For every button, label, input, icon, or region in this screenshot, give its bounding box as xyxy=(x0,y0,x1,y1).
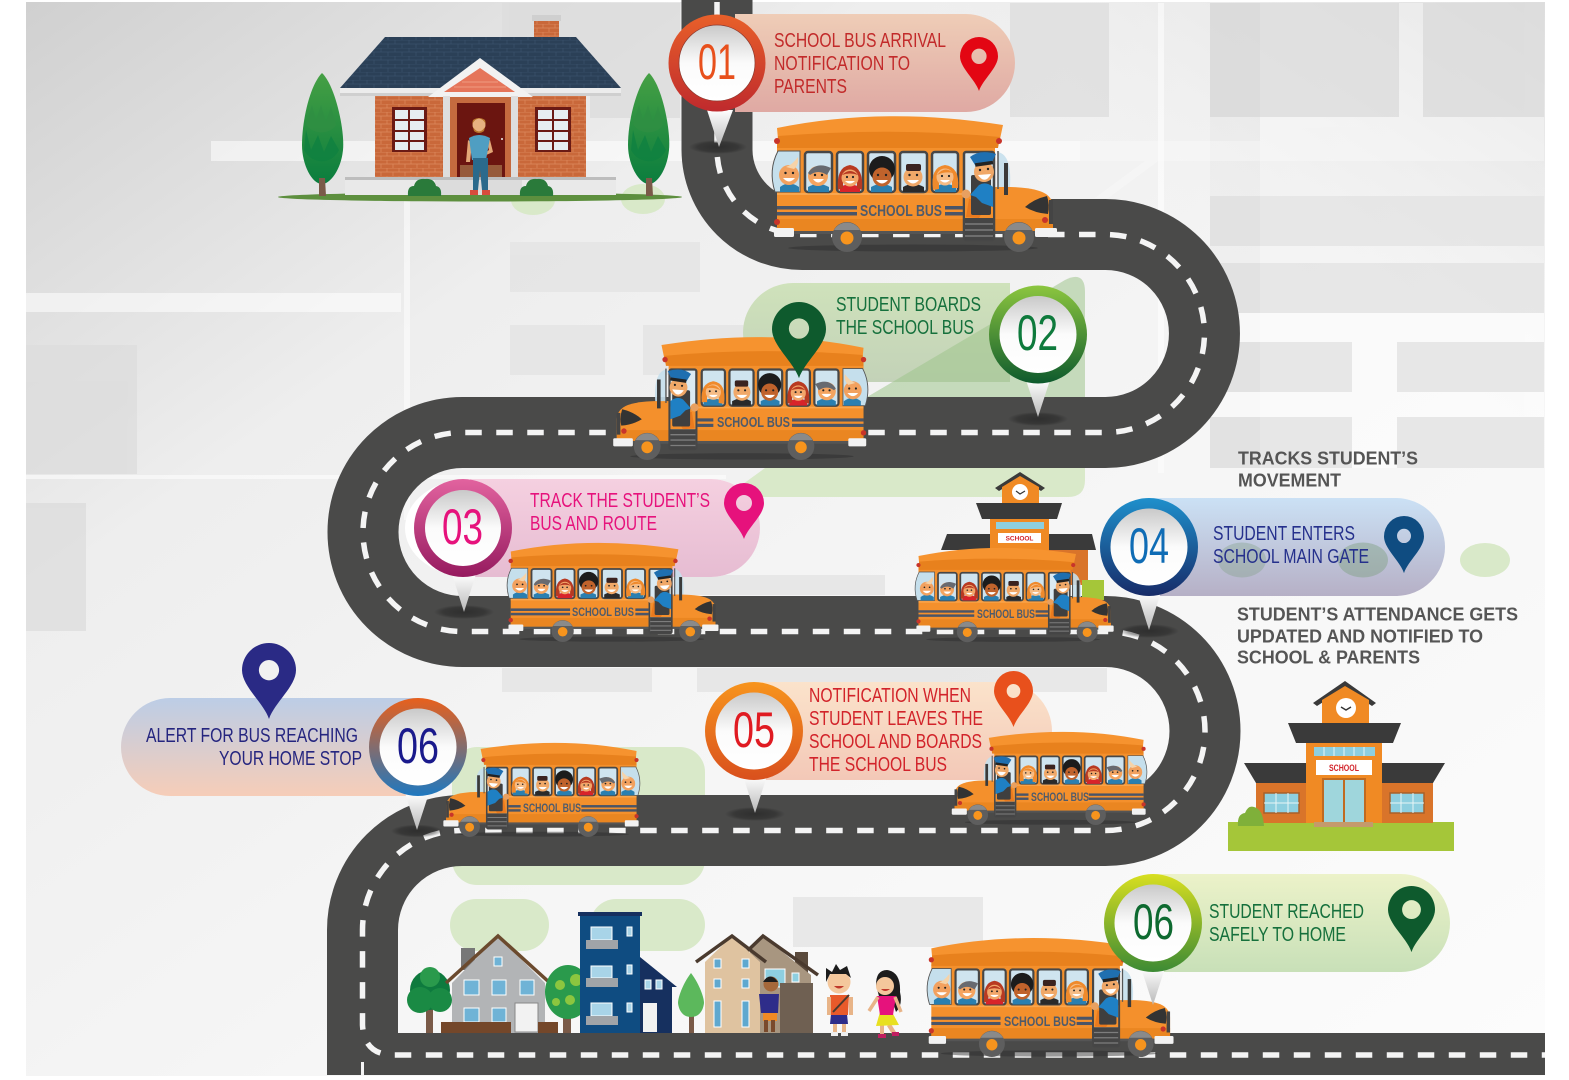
panel: step 04 school gate xyxy=(1100,498,1445,638)
text xyxy=(836,294,981,339)
beige house xyxy=(696,936,766,1033)
small school behind bus 4 xyxy=(941,472,1104,600)
illustration: neighbourhood houses and children xyxy=(407,912,901,1038)
child boy xyxy=(826,964,853,1036)
badge xyxy=(705,682,803,780)
badge: 04 xyxy=(1129,518,1169,574)
brown house xyxy=(740,936,818,1033)
note: attendance xyxy=(1237,604,1518,668)
badge xyxy=(1100,498,1198,596)
small tree xyxy=(678,973,704,1033)
pointer xyxy=(391,793,443,838)
badge xyxy=(369,698,467,796)
grey house xyxy=(441,936,558,1033)
bus 5 xyxy=(952,732,1147,825)
bus 4: SCHOOL BUS xyxy=(977,609,1035,621)
text xyxy=(809,685,983,776)
text: NOTIFICATION WHEN xyxy=(809,685,971,707)
pointer xyxy=(689,110,747,154)
child girl xyxy=(869,970,901,1038)
pin xyxy=(724,483,764,539)
badge xyxy=(989,286,1087,384)
bus 6 xyxy=(443,743,640,837)
panel: step 02 boards xyxy=(772,286,1087,426)
panel: step 02 background pill xyxy=(743,277,1085,400)
pointer xyxy=(1141,968,1165,1005)
child small xyxy=(759,976,779,1032)
bus 2 xyxy=(613,337,868,460)
pointer xyxy=(1008,380,1068,426)
text: SCHOOL BUS ARRIVAL xyxy=(774,30,946,52)
pin xyxy=(994,671,1033,727)
text: STUDENT REACHED xyxy=(1209,901,1364,923)
pin xyxy=(242,643,296,719)
note: attendance: SCHOOL & PARENTS xyxy=(1237,646,1420,668)
tree right xyxy=(628,73,669,196)
text: ALERT FOR BUS REACHING xyxy=(146,725,358,747)
note: attendance: UPDATED AND NOTIFIED TO xyxy=(1237,626,1483,646)
text: THE SCHOOL BUS xyxy=(836,317,974,339)
text: THE SCHOOL BUS xyxy=(809,754,947,776)
badge: 06 xyxy=(397,718,439,774)
text: TRACK THE STUDENT’S xyxy=(530,490,710,512)
panel: step 05 leaves school xyxy=(705,671,1052,821)
blue building xyxy=(578,912,677,1033)
pin xyxy=(1384,516,1424,573)
pointer xyxy=(1119,592,1179,638)
text: STUDENT ENTERS xyxy=(1213,523,1355,545)
note: tracks movement xyxy=(1238,448,1418,490)
text: YOUR HOME STOP xyxy=(219,748,362,770)
badge: 01 xyxy=(698,34,736,90)
note: tracks movement: TRACKS STUDENT’S xyxy=(1238,448,1418,468)
badge: 06 xyxy=(1133,894,1174,950)
bus 5: SCHOOL BUS xyxy=(1031,792,1089,804)
pin xyxy=(960,37,998,91)
badge xyxy=(414,479,512,577)
text: SCHOOL MAIN GATE xyxy=(1213,546,1369,568)
man at door xyxy=(466,118,493,195)
green background blobs xyxy=(450,184,1510,951)
bus 3 xyxy=(507,543,718,642)
bus 6: SCHOOL BUS xyxy=(523,803,581,815)
road xyxy=(327,0,1545,1075)
text xyxy=(146,725,362,770)
badge xyxy=(1104,874,1202,972)
panel: step 07 reached home xyxy=(1104,874,1450,1005)
bus 1 xyxy=(772,116,1057,252)
note: attendance: STUDENT’S ATTENDANCE GETS xyxy=(1237,604,1518,624)
text: STUDENT LEAVES THE xyxy=(809,708,983,730)
pointer xyxy=(434,574,494,619)
tree left xyxy=(407,967,452,1033)
pin xyxy=(772,302,826,378)
tree left xyxy=(302,73,343,196)
badge xyxy=(668,14,766,112)
bus 1: SCHOOL BUS xyxy=(860,203,942,220)
panel: step 03 tracking xyxy=(405,479,764,619)
bus 7: SCHOOL BUS xyxy=(1004,1013,1076,1029)
small school behind bus 4: SCHOOL xyxy=(1006,536,1033,542)
illustration: home with man and trees xyxy=(278,15,682,202)
text xyxy=(1213,523,1369,568)
pin xyxy=(1388,886,1435,952)
pointer xyxy=(725,776,785,821)
badge: 05 xyxy=(733,702,775,758)
bus 4 xyxy=(915,548,1114,642)
illustration: school building xyxy=(1228,681,1454,851)
panel: step 06 alert home stop xyxy=(121,643,467,838)
text: NOTIFICATION TO xyxy=(774,53,910,75)
text: SCHOOL AND BOARDS xyxy=(809,731,982,753)
bus 2: SCHOOL BUS xyxy=(717,415,790,431)
text: SAFELY TO HOME xyxy=(1209,924,1346,946)
bus 7 xyxy=(927,938,1174,1057)
panel: step 01 notification xyxy=(668,14,1015,154)
bus 3: SCHOOL BUS xyxy=(572,605,634,619)
text xyxy=(1209,901,1364,946)
note: tracks movement: MOVEMENT xyxy=(1238,470,1342,490)
text: PARENTS xyxy=(774,76,847,98)
text xyxy=(774,30,946,98)
text: BUS AND ROUTE xyxy=(530,513,657,535)
badge: 02 xyxy=(1017,305,1058,361)
text: STUDENT BOARDS xyxy=(836,294,981,316)
badge: 03 xyxy=(442,499,483,555)
illustration: school building: SCHOOL xyxy=(1329,763,1359,774)
lime tree xyxy=(545,965,591,1033)
text xyxy=(530,490,710,535)
